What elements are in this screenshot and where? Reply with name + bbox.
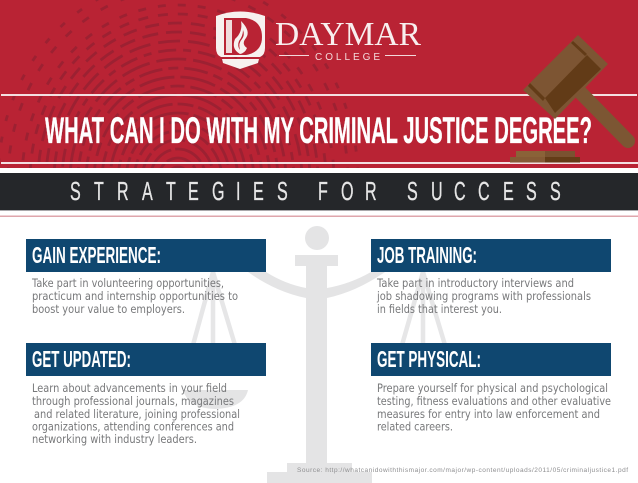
text: gain experience: practicum and internship opportunities to: [32, 289, 238, 303]
logo subtitle: [279, 52, 416, 63]
fingerprint: [0, 0, 359, 168]
band: strategies for success: STRATEGIES FOR SUCCESS: [70, 176, 561, 206]
panel: job training: [371, 239, 611, 316]
text: get updated: Learn about advancements in your field: [32, 381, 227, 395]
text: get updated: [32, 381, 240, 446]
text: get updated: and related literature, joining professional: [34, 407, 240, 421]
panel: red header: [0, 0, 638, 168]
logo wordmark: DAYMAR: [275, 16, 421, 53]
panel: job training: JOB TRAINING:: [377, 242, 477, 268]
text: job training: in fields that interest you.: [377, 302, 502, 316]
text: job training: [376, 276, 591, 316]
text: get physical: [377, 381, 611, 434]
text: get physical: measures for entry into law enforcement and: [377, 407, 600, 421]
panel: get physical: [371, 343, 611, 434]
logo shield: [216, 12, 265, 69]
text: gain experience: [31, 276, 238, 316]
panel: get updated: [26, 343, 266, 446]
panel: gain experience: GAIN EXPERIENCE:: [32, 242, 161, 268]
text: gain experience: boost your value to employers.: [32, 302, 185, 316]
panel: get physical: GET PHYSICAL:: [377, 346, 481, 372]
text: job training: job shadowing programs with professionals: [376, 289, 591, 303]
logo: [216, 12, 421, 69]
text: get updated: networking with industry leaders.: [32, 432, 197, 446]
icon: gavel: [510, 35, 628, 162]
text: get updated: organizations, attending conferences and: [32, 420, 234, 434]
icon: justice scale: [183, 226, 445, 483]
text: get updated: through professional journals, magazines: [32, 394, 234, 408]
panel: gain experience: [26, 239, 266, 316]
text: gain experience: Take part in volunteering opportunities,: [31, 276, 224, 290]
text: job training: Take part in introductory interviews and: [376, 276, 574, 290]
panel: get updated: GET UPDATED:: [32, 346, 131, 372]
logo subtitle: COLLEGE: [315, 52, 380, 63]
source credit: Source: http://whatcanidowiththismajor.com/major/wp-content/uploads/2011/05/criminaljustice1.pdf: [297, 467, 628, 474]
text: get physical: related careers.: [377, 420, 453, 434]
band: strategies for success: [0, 173, 638, 217]
